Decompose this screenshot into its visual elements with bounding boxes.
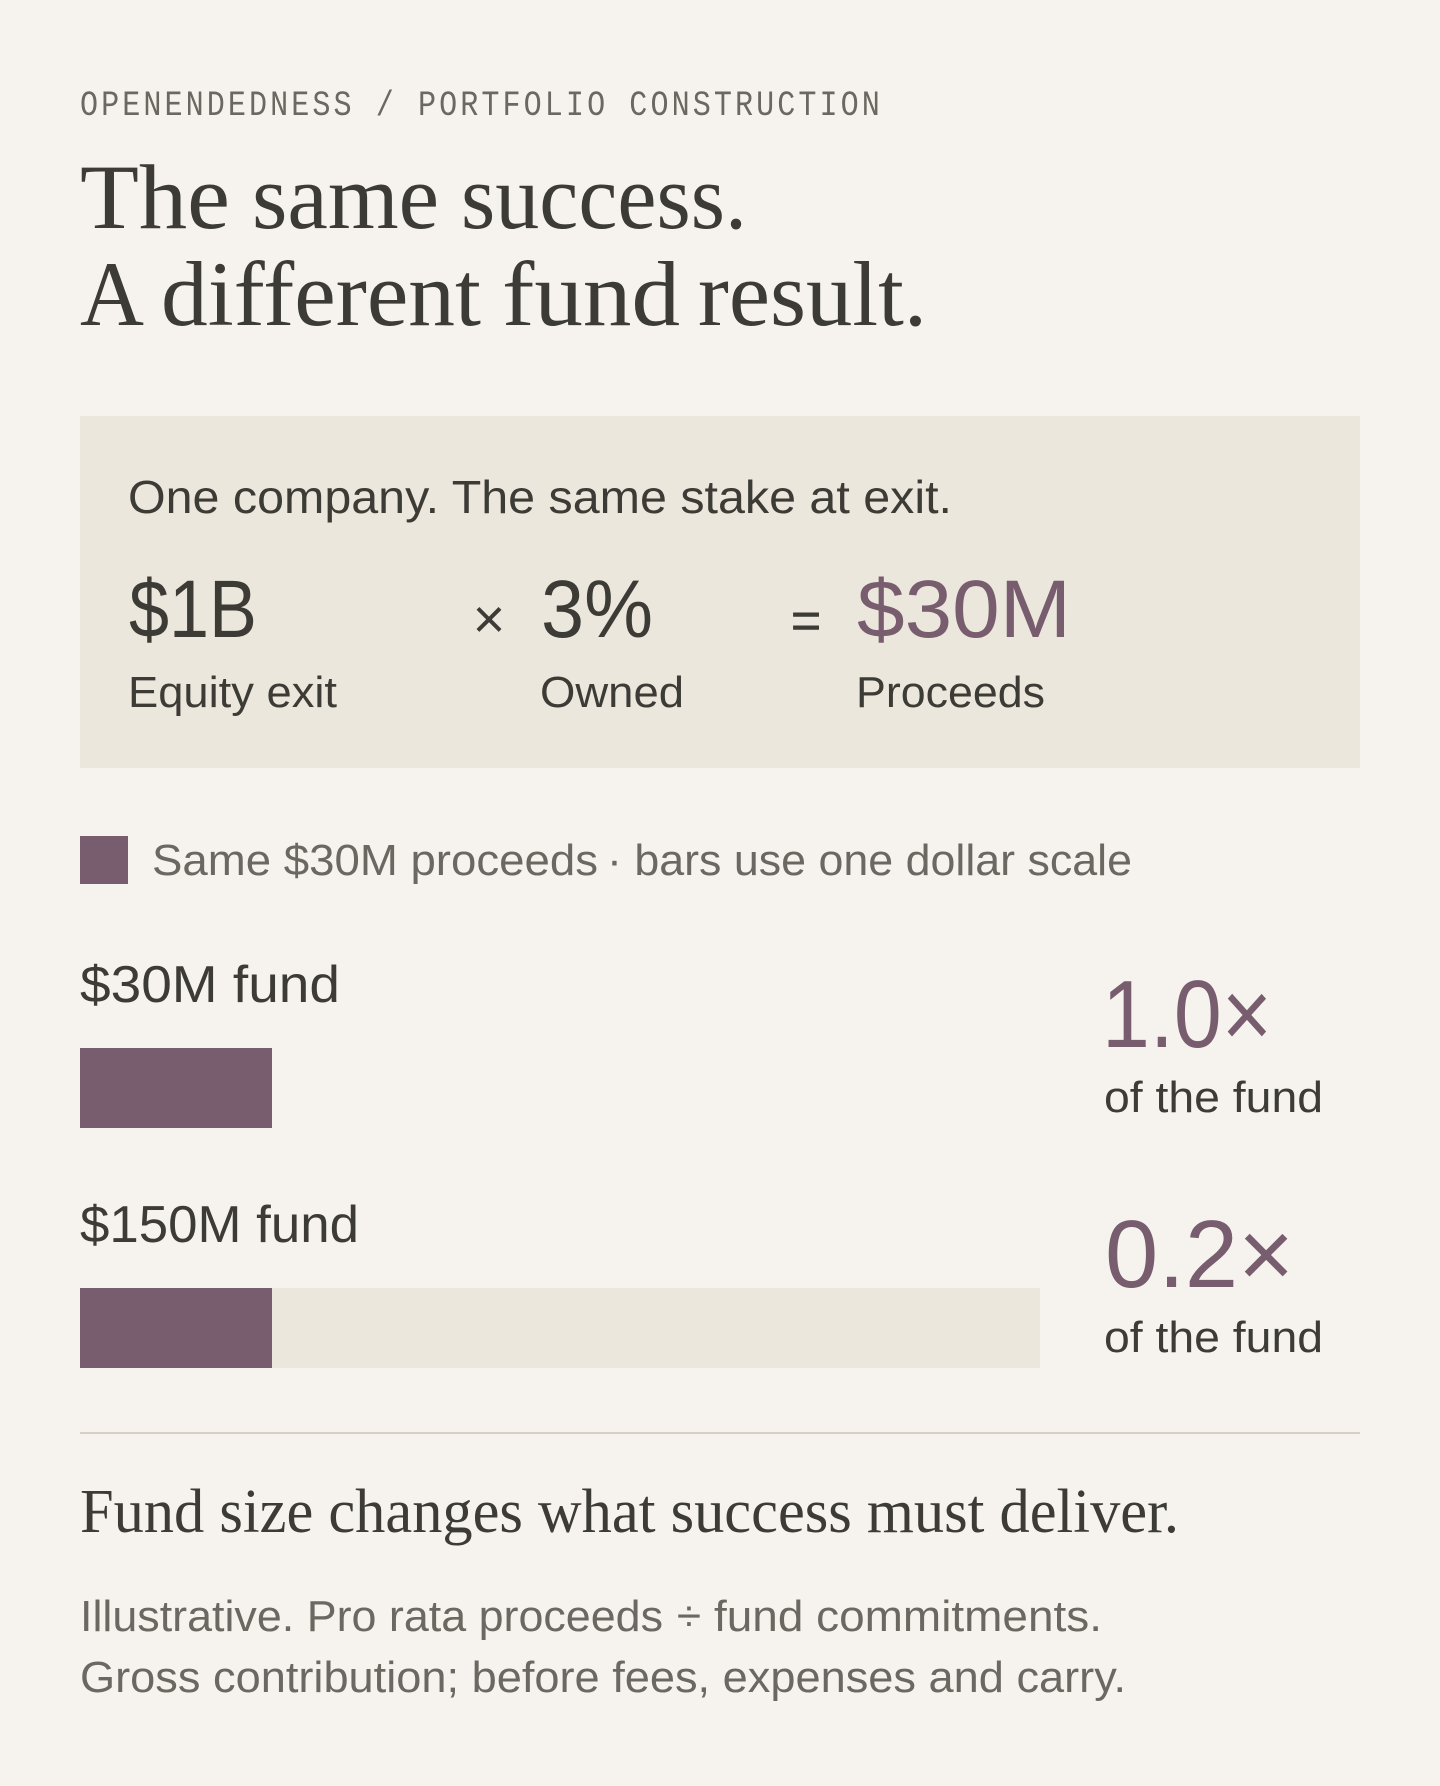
panel background: [80, 416, 1360, 768]
title: success.: [461, 146, 747, 248]
footnote: Illustrative. Pro rata proceeds: [80, 1592, 663, 1641]
title: The: [80, 146, 230, 248]
legend text: Same $30M proceeds: [152, 836, 598, 885]
multiple value: 1.0×: [1102, 961, 1272, 1068]
footnote: ÷: [677, 1592, 701, 1641]
bar: proceeds: [80, 1288, 272, 1368]
term: proceeds: [856, 564, 1071, 717]
title: different: [161, 243, 481, 345]
bar: proceeds: [80, 1048, 272, 1128]
operator: times: ×: [473, 587, 505, 650]
term: proceeds: $30M: [857, 564, 1071, 655]
legend swatch: [80, 836, 128, 884]
term: equity exit: $1B: [129, 564, 257, 655]
title: fund: [502, 243, 680, 345]
header: [80, 86, 927, 345]
takeaway: Fund size changes what success must deliver.: [80, 1478, 1179, 1546]
legend: [80, 836, 1132, 885]
title: A: [80, 243, 144, 345]
operator: equals: =: [791, 592, 821, 650]
chart row: $150M fund: [80, 1196, 1323, 1368]
multiple caption: of the fund: [1104, 1313, 1323, 1362]
footnote: fund commitments.: [714, 1592, 1102, 1641]
row label: $150M fund: [80, 1196, 359, 1254]
footnote: Gross contribution; before fees, expenses and carry.: [80, 1653, 1126, 1702]
panel: formula: [80, 416, 1360, 768]
multiple caption: of the fund: [1104, 1073, 1323, 1122]
title: result.: [698, 243, 927, 345]
title: same: [252, 146, 439, 248]
chart row: $30M fund: [80, 956, 1323, 1128]
row label: $30M fund: [80, 956, 340, 1014]
term: equity exit: [128, 564, 337, 717]
term: proceeds: Proceeds: [856, 668, 1045, 717]
bar: fund track: [80, 1288, 1040, 1368]
eyebrow: OPENENDEDNESS / PORTFOLIO CONSTRUCTION: [80, 86, 880, 126]
footnote: [80, 1592, 1126, 1702]
multiple value: 0.2×: [1105, 1201, 1294, 1308]
title: [80, 146, 927, 345]
term: owned: [540, 564, 684, 717]
term: owned: 3%: [541, 564, 653, 655]
term: equity exit: Equity exit: [128, 668, 337, 717]
legend text: · bars use one dollar scale: [607, 836, 1132, 885]
term: owned: Owned: [540, 668, 684, 717]
panel intro: One company. The same stake at exit.: [128, 471, 952, 523]
legend text: [152, 836, 1132, 885]
